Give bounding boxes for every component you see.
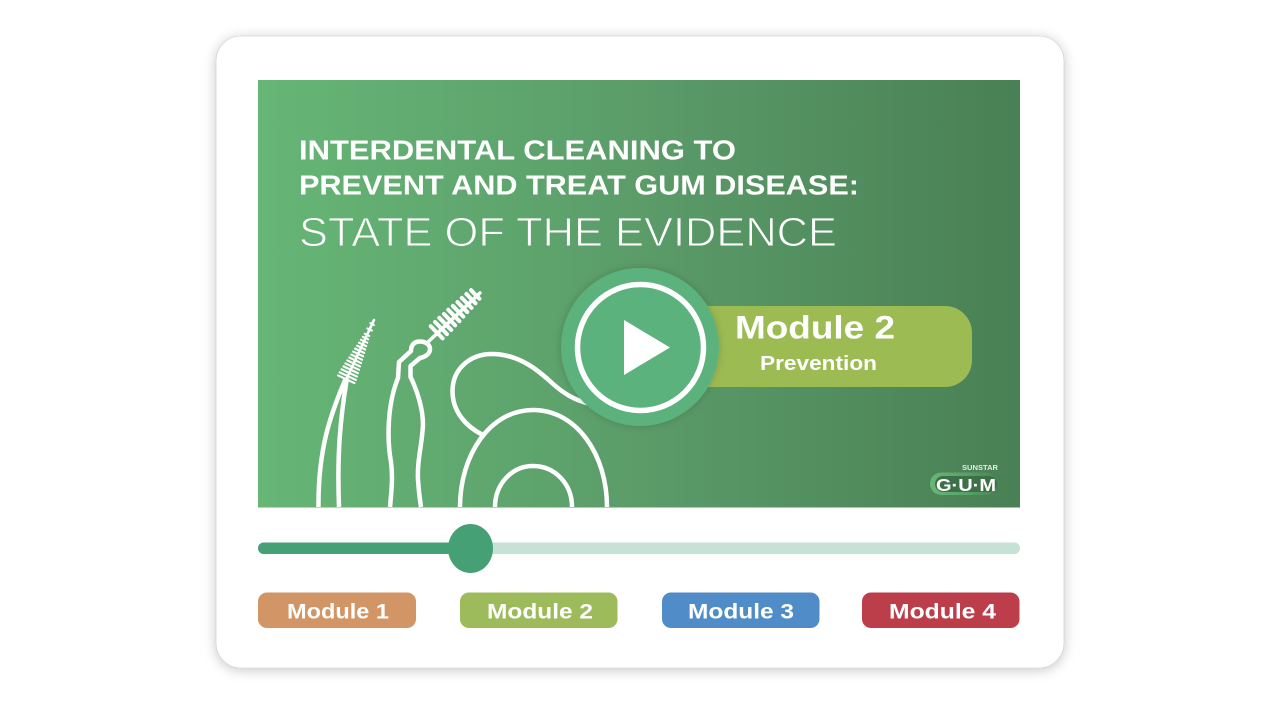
label: module 2 prevention: [690, 306, 972, 387]
button: module 3: [662, 592, 820, 628]
label: module 2 prevention: Prevention: [760, 352, 877, 375]
title: INTERDENTAL CLEANING TO: [299, 134, 736, 166]
panel: video frame: [258, 80, 1020, 508]
icon: dental floss spool: [452, 354, 607, 507]
logo: Sunstar GUM: G·U·M: [936, 475, 996, 495]
button: module 3: Module 3: [688, 600, 794, 624]
progress handle: [448, 524, 493, 573]
icon: play button: [561, 268, 719, 426]
title: [299, 134, 859, 200]
subtitle: STATE OF THE EVIDENCE: [299, 209, 837, 255]
button: module 1: [258, 592, 416, 628]
label: module 2 prevention: Module 2: [735, 310, 895, 346]
icon: thin interdental pick: [318, 320, 380, 507]
progress bar: [258, 524, 1020, 573]
panel: video player card: [216, 36, 1064, 668]
button: module 1: Module 1: [287, 600, 389, 624]
button: module 2: Module 2: [487, 600, 593, 624]
logo: Sunstar GUM: [930, 463, 999, 495]
button: module 4: [862, 592, 1020, 628]
button: module 2: [460, 592, 618, 628]
logo: Sunstar GUM: SUNSTAR: [962, 463, 999, 472]
button: module 4: Module 4: [889, 600, 996, 624]
icon: angled interdental brush: [389, 288, 481, 507]
title: PREVENT AND TREAT GUM DISEASE:: [299, 170, 859, 200]
